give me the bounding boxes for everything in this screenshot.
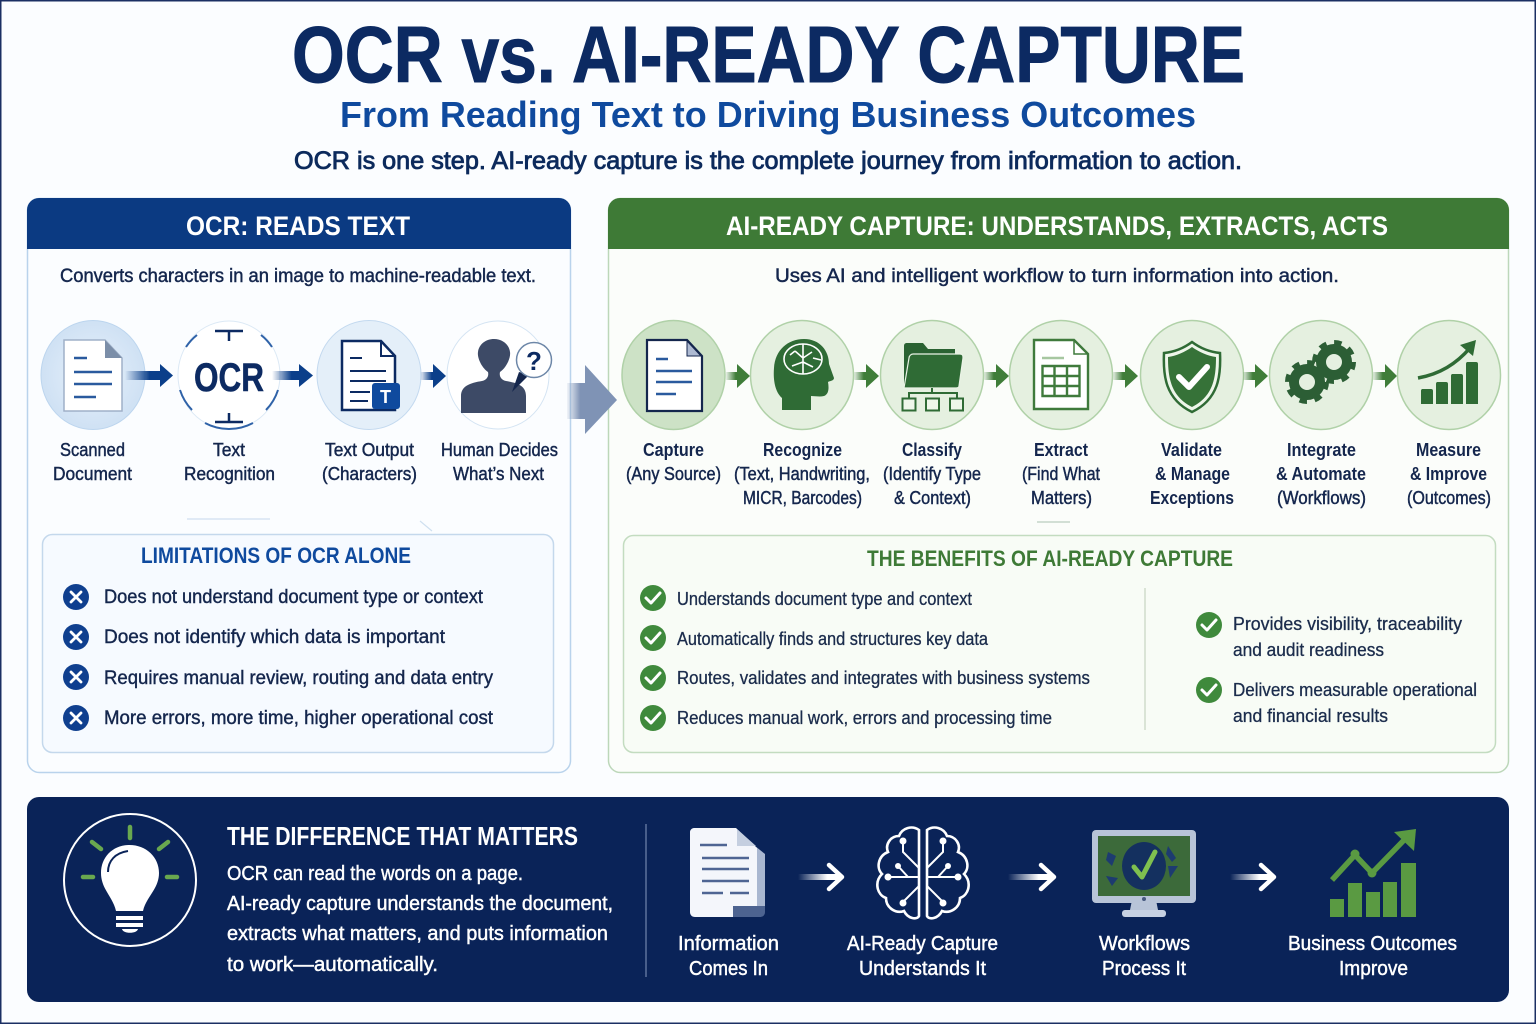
arrow: extract to validate [1113,364,1138,388]
arrow: OCR to text output [272,364,313,387]
step labels: OCR: Human Decides [441,440,558,460]
step labels: AI-ready capture: Classify [902,440,962,460]
band: the difference that matters [27,797,1509,1002]
benefit 3 [640,665,1090,691]
icon: text output: T [380,387,391,407]
step labels: AI-ready capture: Validate [1161,440,1222,460]
arrow: recognize to classify [854,364,879,388]
limitation 3: Requires manual review, routing and data entry [104,668,493,689]
icon: outcomes chart [1330,829,1416,917]
step labels: OCR: Text Output [325,440,414,460]
benefit 5 [1196,612,1462,660]
step labels: AI-ready capture: (Find What [1022,464,1100,484]
benefits box [624,536,1496,752]
icon: recognize brain head [750,320,854,430]
step labels: OCR: What’s Next [453,464,544,484]
subtitle: From Reading Text to Driving Business Outcomes [340,94,1196,135]
step labels: AI-ready capture: & Improve [1410,464,1487,484]
benefit 4 [640,705,1052,731]
band text: extracts what matters, and puts information [227,923,608,945]
limitation 4: More errors, more time, higher operational cost [104,708,494,729]
step labels: AI-ready capture: (Workflows) [1277,488,1366,508]
step labels: AI-ready capture: MICR, Barcodes) [743,488,862,508]
panel description: AI-ready capture: Uses AI and intelligent workflow to turn information into action. [775,266,1339,287]
icon: human decides [447,321,552,429]
benefit 6 [1196,677,1477,726]
band heading: THE DIFFERENCE THAT MATTERS [227,821,578,851]
icon: integrate gears [1270,320,1372,430]
arrow: text output to human [420,364,446,388]
limitation 2: Does not identify which data is important [104,627,446,648]
arrow: information to capture [798,865,842,889]
arrow: workflows to outcomes [1230,865,1274,889]
step labels: AI-ready capture: & Context) [894,488,971,508]
step labels: AI-ready capture: (Text, Handwriting, [734,464,870,484]
flow labels [678,933,1457,980]
benefit 4: Reduces manual work, errors and processing time [677,708,1052,728]
flow labels: Understands It [859,958,986,980]
step labels: AI-ready capture: (Outcomes) [1407,488,1491,508]
band text: OCR can read the words on a page. [227,863,523,885]
arrow: document to OCR [125,364,173,387]
benefit 1: Understands document type and context [677,589,972,609]
icon: measure chart [1398,320,1500,430]
icon: classify folder [880,320,984,430]
band text [227,863,613,976]
icon: workflow monitor [1092,830,1196,917]
flow labels: Improve [1339,958,1408,980]
step labels: AI-ready capture: Extract [1034,440,1088,460]
step labels: AI-ready capture: Measure [1416,440,1481,460]
icon: text output [317,320,421,430]
benefit 5: Provides visibility, traceability [1233,614,1462,634]
icon: human decides: ? [526,346,542,376]
step labels: OCR: Scanned [60,440,125,460]
icon: information document [690,828,765,917]
panel header: AI-ready capture [608,198,1509,249]
step labels: AI-ready capture: (Identify Type [883,464,981,484]
arrow: integrate to measure [1373,364,1397,388]
icon: OCR text recognition: OCR [194,356,264,400]
panel heading: OCR: OCR: READS TEXT [186,211,410,241]
benefit 6: and financial results [1233,706,1388,726]
benefit 6: Delivers measurable operational [1233,680,1477,700]
flow labels: Information [678,933,779,955]
arrow: capture to workflows [1008,865,1054,889]
step labels: AI-ready capture: & Manage [1155,464,1230,484]
step labels: OCR [53,440,558,484]
flow labels: Process It [1102,958,1186,980]
step labels: OCR: Document [53,464,132,484]
flow labels: Business Outcomes [1288,933,1457,955]
band text: AI-ready capture understands the document, [227,893,613,915]
benefit 5: and audit readiness [1233,640,1384,660]
arrow: capture to recognize [726,364,750,388]
icon: validate shield [1140,320,1244,430]
panel description: OCR: Converts characters in an image to machine-readable text. [60,266,536,287]
step labels: AI-ready capture [626,440,1491,508]
benefit 3: Routes, validates and integrates with business systems [677,668,1090,688]
step labels: AI-ready capture: & Automate [1276,464,1366,484]
benefit 1 [640,585,972,611]
step labels: AI-ready capture: Integrate [1287,440,1356,460]
step labels: AI-ready capture: Exceptions [1150,488,1234,508]
step labels: AI-ready capture: (Any Source) [626,464,721,484]
band text: to work—automatically. [227,954,438,976]
panel: OCR reads text [27,198,571,772]
step labels: AI-ready capture: Recognize [763,440,842,460]
icon: extract spreadsheet [1010,320,1112,430]
step labels: AI-ready capture: Capture [643,440,704,460]
step labels: OCR: Recognition [184,464,275,484]
icon: AI brain [877,828,969,918]
limitation 1: Does not understand document type or context [104,587,484,608]
benefit 2: Automatically finds and structures key data [677,629,989,649]
panel header: OCR [27,198,571,249]
flow labels: Workflows [1099,933,1190,955]
arrow: classify to extract [984,364,1009,388]
limitations box [42,534,554,752]
title: OCR vs. AI-READY CAPTURE [292,10,1245,99]
icon: OCR text recognition [178,321,280,429]
panel: AI-ready capture [608,198,1509,772]
arrow: validate to integrate [1243,364,1268,388]
arrow: OCR to AI-ready capture [567,365,617,434]
step labels: OCR: Text [213,440,245,460]
panel heading: AI-ready capture: AI-READY CAPTURE: UNDERSTANDS, EXTRACTS, ACTS [726,211,1388,241]
icon: light bulb [64,814,196,946]
limitations heading: LIMITATIONS OF OCR ALONE [141,543,411,568]
step labels: OCR: (Characters) [322,464,417,484]
step labels: AI-ready capture: Matters) [1031,488,1092,508]
benefits heading: THE BENEFITS OF AI-READY CAPTURE [867,546,1233,571]
icon: scanned document [41,320,145,430]
tagline: OCR is one step. AI-ready capture is the complete journey from information to action. [294,147,1242,175]
flow labels: Comes In [689,958,768,980]
flow labels: AI-Ready Capture [847,933,998,955]
benefit 2 [640,625,989,651]
icon: capture document [622,320,725,430]
